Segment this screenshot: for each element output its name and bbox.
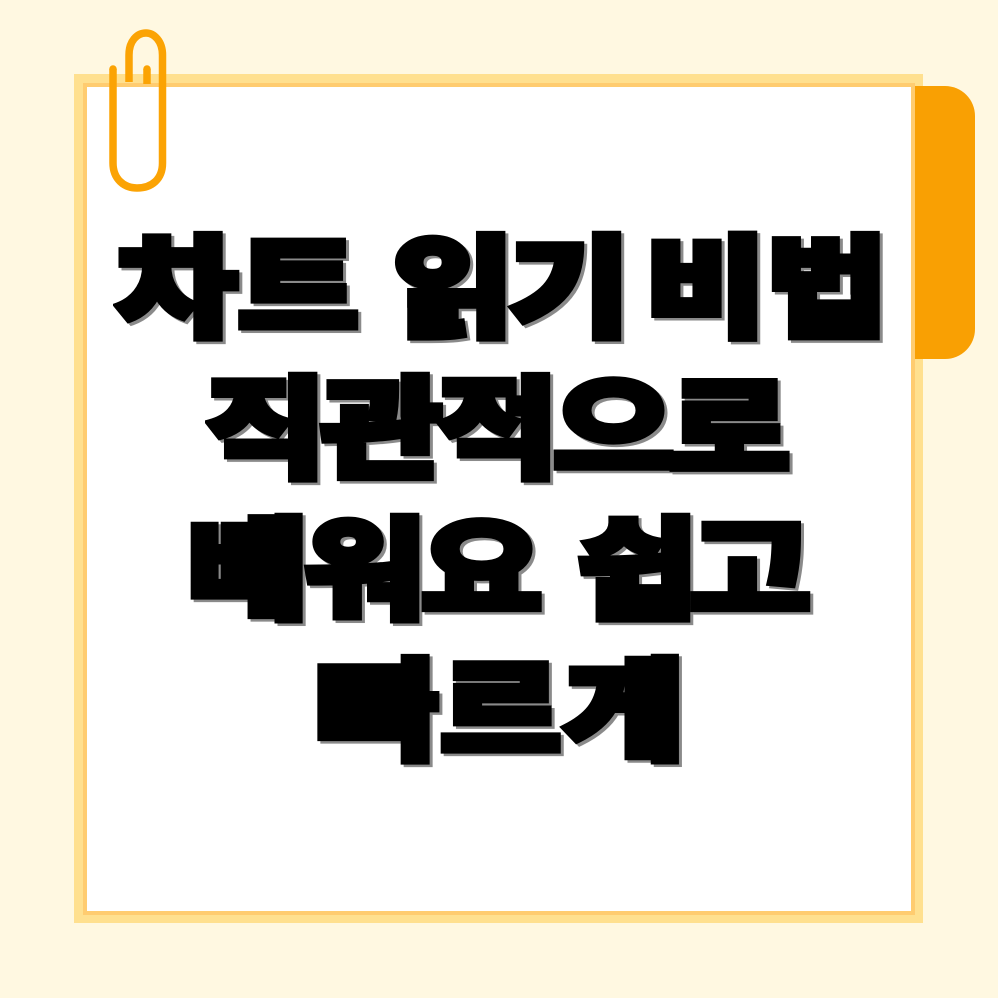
title line 3: 배워요 (187, 510, 538, 633)
icon: paperclip (109, 29, 166, 192)
title line 4: 빠르게 (317, 651, 686, 774)
tab: orange side tab (915, 86, 975, 359)
title line 1: 차트 (116, 228, 359, 351)
title line 1: 비법 (645, 228, 888, 351)
panel: white page (83, 83, 915, 915)
panel: paper card outer border (74, 74, 923, 923)
title line 3: 쉽고 (577, 510, 802, 633)
title line 1: 읽기 (393, 228, 624, 351)
title line 2: 직관적으로 (205, 369, 785, 492)
